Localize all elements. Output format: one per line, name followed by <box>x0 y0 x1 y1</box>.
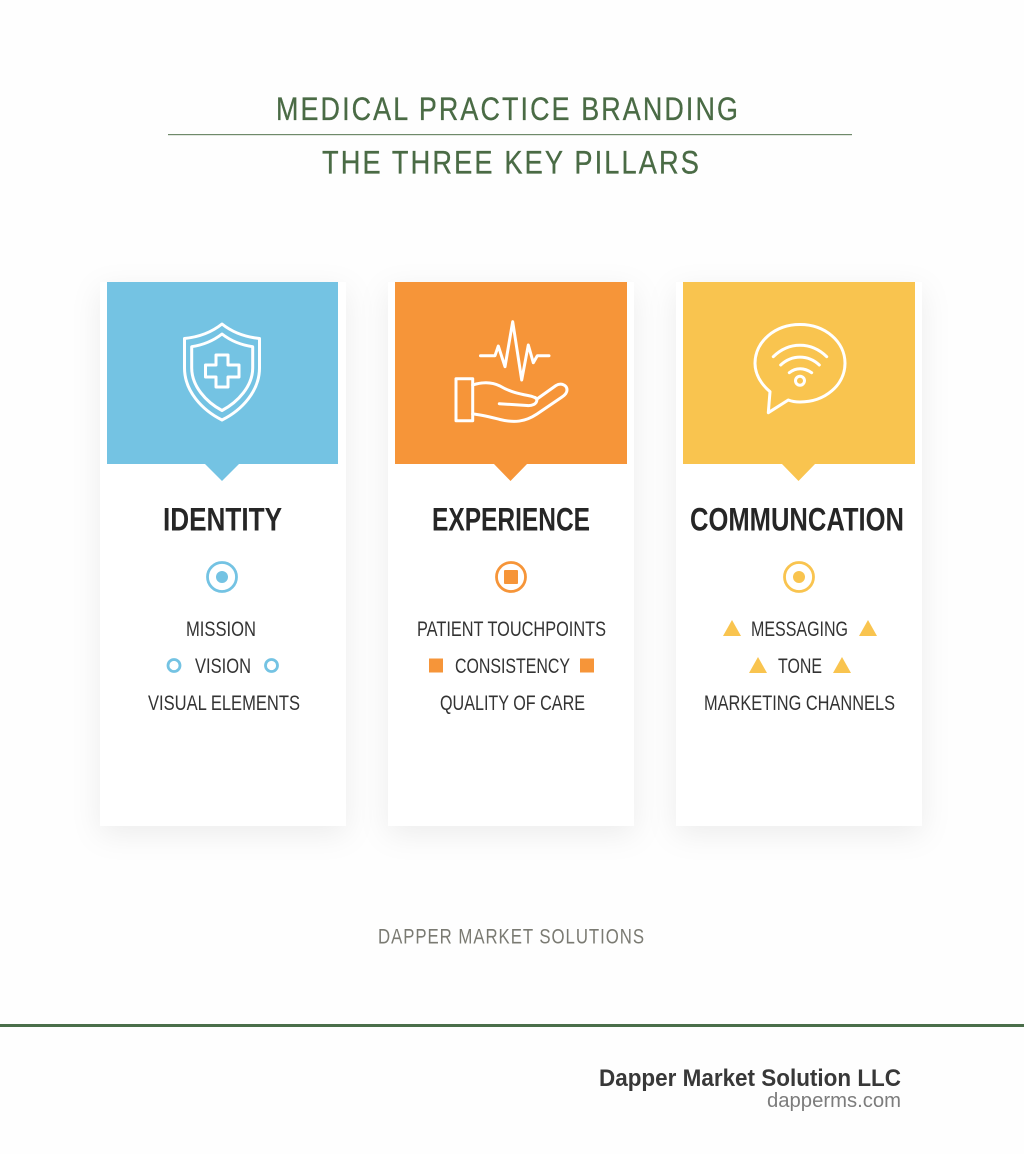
communication items <box>704 618 895 715</box>
experience items: CONSISTENCY <box>455 655 570 678</box>
icon: shield with cross <box>184 324 260 420</box>
footer rule <box>0 1024 1024 1027</box>
title line 1: MEDICAL PRACTICE BRANDING <box>276 91 740 127</box>
panel: experience <box>388 282 634 826</box>
communication items: MARKETING CHANNELS <box>704 692 895 715</box>
identity header block <box>107 282 338 481</box>
panel: identity <box>100 282 346 826</box>
communication items: MESSAGING <box>751 618 848 641</box>
title <box>168 91 852 180</box>
icon: target yellow <box>784 562 814 592</box>
identity items: VISUAL ELEMENTS <box>148 692 300 715</box>
footer brand: Dapper Market Solution LLC <box>599 1065 901 1092</box>
experience heading: EXPERIENCE <box>432 502 590 538</box>
icon: speech bubble with wifi <box>755 324 845 413</box>
identity heading: IDENTITY <box>163 502 282 538</box>
identity items <box>148 618 300 715</box>
experience items: QUALITY OF CARE <box>440 692 585 715</box>
experience items <box>417 618 606 715</box>
footer brand <box>599 1065 901 1112</box>
title line 2: THE THREE KEY PILLARS <box>322 144 701 180</box>
icon: hand with pulse <box>456 322 567 421</box>
communication items: TONE <box>778 655 822 678</box>
communication header block <box>683 282 915 481</box>
identity items: VISION <box>195 655 251 678</box>
icon: target orange <box>496 562 526 592</box>
panel: communication <box>676 282 922 826</box>
identity items: MISSION <box>186 618 256 641</box>
communication heading: COMMUNCATION <box>690 502 904 538</box>
experience items: PATIENT TOUCHPOINTS <box>417 618 606 641</box>
caption: DAPPER MARKET SOLUTIONS <box>378 926 645 948</box>
icon: target blue <box>208 562 236 592</box>
experience header block <box>395 282 627 481</box>
footer brand: dapperms.com <box>767 1090 901 1112</box>
